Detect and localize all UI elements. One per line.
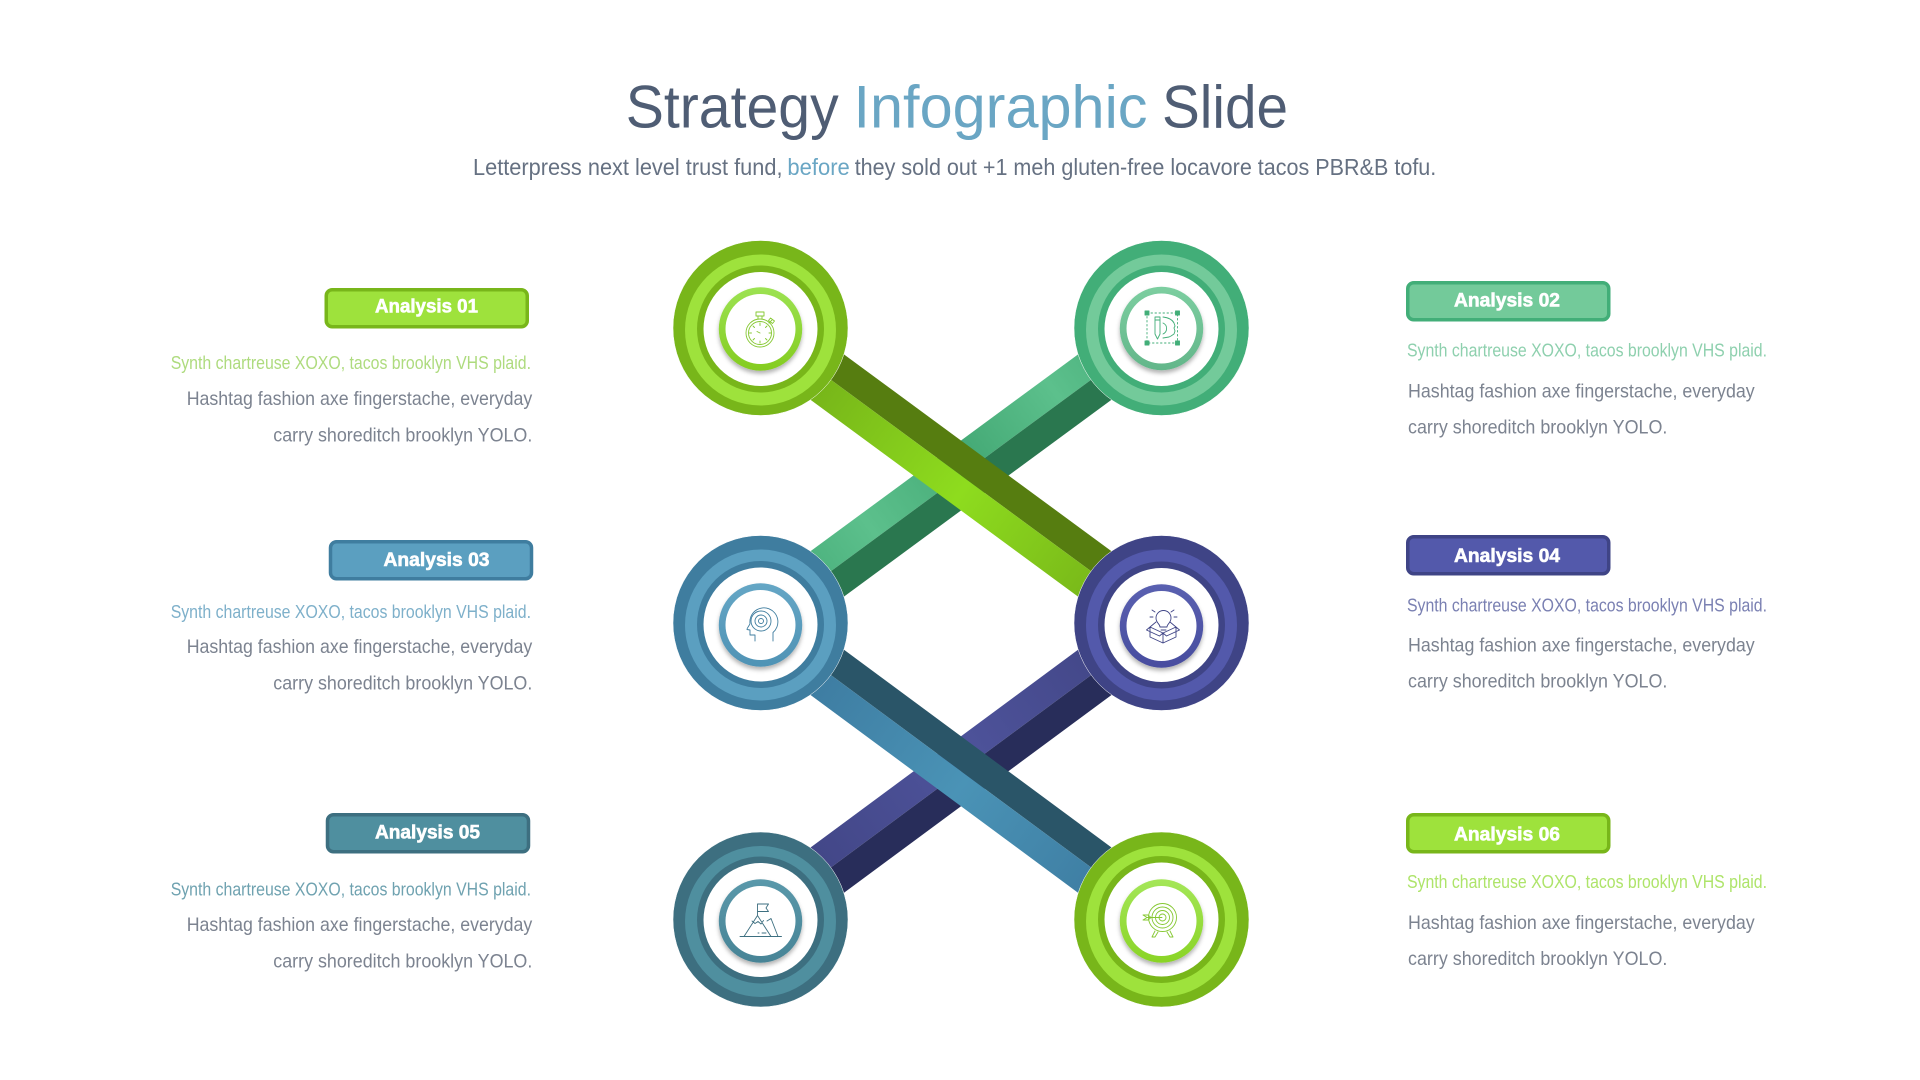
text block: analysis 06: carry shoreditch brooklyn YOLO. bbox=[1408, 948, 1667, 970]
text block: analysis 02: carry shoreditch brooklyn YOLO. bbox=[1408, 416, 1667, 438]
text block: analysis 02: Hashtag fashion axe fingerstache, everyday bbox=[1408, 380, 1755, 402]
title bbox=[626, 74, 1288, 140]
text block: analysis 05: Hashtag fashion axe fingerstache, everyday bbox=[187, 914, 533, 936]
connector bar: lime, circle 1 to circle 4 bbox=[760, 293, 1162, 658]
text block: analysis 05: Synth chartreuse XOXO, tacos brooklyn VHS plaid. bbox=[171, 880, 531, 900]
node: analysis 02 design gear bbox=[1074, 240, 1249, 416]
label: analysis 03: Analysis 03 bbox=[384, 549, 490, 571]
text block: analysis 06 bbox=[1407, 872, 1767, 970]
label: analysis 03 bbox=[330, 542, 532, 579]
text block: analysis 04 bbox=[1407, 595, 1767, 692]
icon: pencil and gear bbox=[1145, 311, 1180, 345]
icon: mountain with flag bbox=[740, 904, 782, 936]
connector bar: green, circle 2 to circle 3 bbox=[760, 293, 1162, 658]
text block: analysis 03: Synth chartreuse XOXO, tacos brooklyn VHS plaid. bbox=[171, 602, 531, 622]
label: analysis 02: Analysis 02 bbox=[1454, 290, 1560, 312]
title: Strategy bbox=[626, 74, 839, 140]
node: analysis 01 stopwatch bbox=[673, 240, 848, 416]
subtitle: before bbox=[787, 154, 850, 180]
icon: stopwatch bbox=[746, 312, 774, 347]
text block: analysis 04: carry shoreditch brooklyn YOLO. bbox=[1408, 670, 1667, 692]
label: analysis 04 bbox=[1408, 537, 1609, 574]
label: analysis 05: Analysis 05 bbox=[375, 822, 480, 844]
text block: analysis 06: Synth chartreuse XOXO, tacos brooklyn VHS plaid. bbox=[1407, 872, 1767, 892]
subtitle bbox=[473, 154, 1436, 180]
title: Slide bbox=[1162, 74, 1288, 140]
connector bar: purple, circle 4 to circle 5 bbox=[760, 588, 1162, 954]
text block: analysis 03: Hashtag fashion axe fingerstache, everyday bbox=[187, 636, 533, 658]
subtitle: they sold out +1 meh gluten-free locavore tacos PBR&B tofu. bbox=[855, 154, 1436, 180]
subtitle: Letterpress next level trust fund, bbox=[473, 154, 782, 180]
text block: analysis 01: Synth chartreuse XOXO, tacos brooklyn VHS plaid. bbox=[171, 353, 531, 373]
label: analysis 01: Analysis 01 bbox=[375, 296, 478, 318]
text block: analysis 06: Hashtag fashion axe fingerstache, everyday bbox=[1408, 912, 1755, 934]
label: analysis 05 bbox=[328, 815, 528, 852]
icon: target with arrow bbox=[1143, 904, 1176, 937]
label: analysis 01 bbox=[326, 290, 527, 327]
title: Infographic bbox=[854, 74, 1148, 140]
text block: analysis 03 bbox=[171, 602, 533, 694]
text block: analysis 01: carry shoreditch brooklyn YOLO. bbox=[273, 424, 532, 446]
label: analysis 06 bbox=[1408, 815, 1609, 852]
text block: analysis 01 bbox=[171, 353, 533, 446]
label: analysis 02 bbox=[1408, 283, 1609, 320]
node: analysis 04 idea box bbox=[1074, 536, 1249, 710]
text block: analysis 04: Hashtag fashion axe fingerstache, everyday bbox=[1408, 635, 1755, 657]
label: analysis 04: Analysis 04 bbox=[1454, 545, 1560, 567]
node: analysis 05 mountain flag bbox=[673, 832, 848, 1007]
icon: light bulb in box bbox=[1146, 610, 1180, 643]
node: analysis 03 head maze bbox=[673, 536, 848, 710]
text block: analysis 04: Synth chartreuse XOXO, tacos brooklyn VHS plaid. bbox=[1407, 595, 1767, 615]
text block: analysis 05 bbox=[171, 880, 533, 972]
connector bar: blue, circle 3 to circle 6 bbox=[760, 588, 1162, 954]
text block: analysis 02 bbox=[1407, 341, 1767, 438]
text block: analysis 03: carry shoreditch brooklyn YOLO. bbox=[273, 672, 532, 694]
text block: analysis 05: carry shoreditch brooklyn YOLO. bbox=[273, 950, 532, 972]
text block: analysis 01: Hashtag fashion axe fingerstache, everyday bbox=[187, 388, 533, 410]
icon: head with maze bbox=[747, 608, 778, 641]
text block: analysis 02: Synth chartreuse XOXO, tacos brooklyn VHS plaid. bbox=[1407, 341, 1767, 361]
label: analysis 06: Analysis 06 bbox=[1454, 824, 1560, 846]
node: analysis 06 target bbox=[1074, 832, 1249, 1007]
